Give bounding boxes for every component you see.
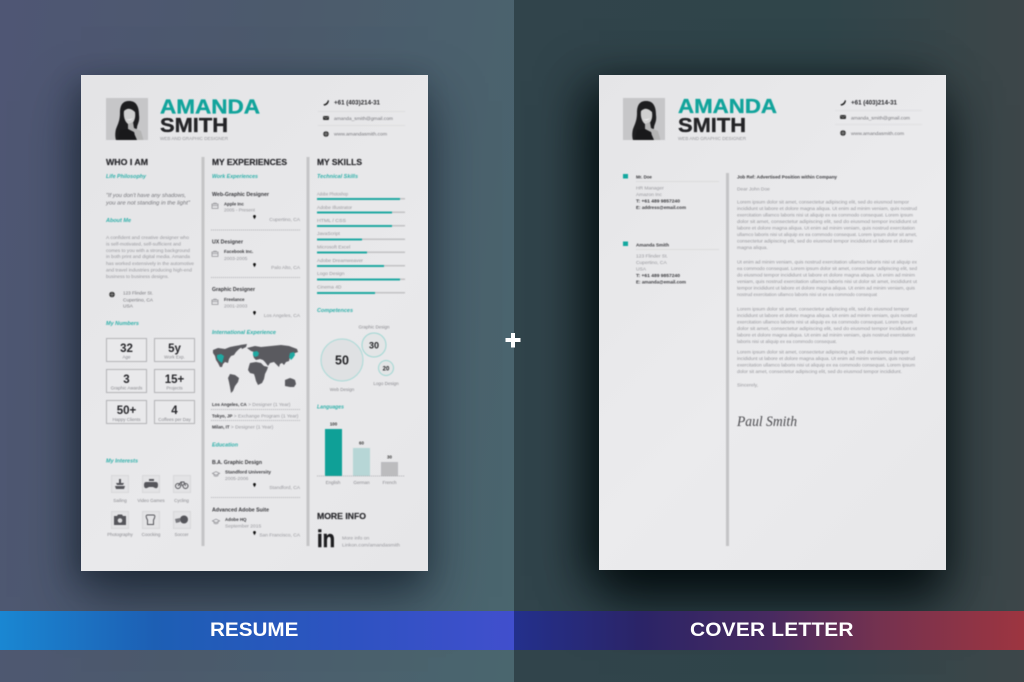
name: WEB AND GRAPHIC DESIGNER (678, 136, 747, 141)
my numbers: Happy Clients (112, 417, 141, 422)
recipient block: HR Manager (636, 186, 664, 192)
my numbers: 5y (168, 343, 181, 355)
skill bars: JavaScript (317, 231, 340, 237)
paragraph 1: magna aliqua. (737, 245, 768, 251)
paragraph 2: veniam, quis nostrud exercitation ullamco laboris nisi ut dolor sit amet, incididunt ut (737, 279, 918, 285)
my numbers: Coffees per Day (158, 417, 191, 422)
locations list: Milan, IT > Designer (1 Year) (212, 424, 274, 430)
my numbers: Graphic Awards (111, 386, 143, 390)
paragraph 3: labore et dolore magna aliqua. Ut enim ad minim veniam, quis nostrud exercitation (737, 332, 915, 338)
bubble chart: 30 (369, 340, 379, 350)
paragraph 2: nostrud exercitation ullamco laboris nisi ut ex ea commodo consequat (737, 292, 878, 298)
paragraph 2: do eiusmod tempor incididunt ut labore et dolore magna aliqua. Ut enim ad minim (737, 272, 915, 278)
column: who i am: business to business designs. (106, 274, 169, 280)
column: who i am: has worked extensively in the automotive (106, 261, 194, 267)
panel: resume page (81, 75, 428, 571)
letter body (737, 174, 918, 388)
paragraph 3 (737, 306, 918, 345)
contact details (835, 100, 922, 137)
paragraph 1 (737, 200, 918, 251)
panel: cover letter page (599, 75, 946, 570)
column: who i am: comes to you with a strong background (106, 248, 190, 254)
my numbers: 3 (123, 374, 130, 386)
sender block: E: amanda@email.com (636, 280, 686, 284)
skill bars: HTML / CSS (317, 218, 347, 224)
language bar chart: French (382, 480, 397, 485)
job: graphic designer: Graphic Designer (212, 287, 255, 293)
bubble chart: 20 (383, 366, 390, 372)
name: SMITH (678, 114, 746, 137)
column divider (726, 173, 729, 546)
sender block: T: +61 489 9857240 (636, 273, 681, 278)
my interests: Soccer (174, 532, 189, 537)
contact details: amanda_smith@gmail.com (851, 116, 910, 122)
job: web-graphic designer: 2005 - Present (224, 208, 256, 214)
sender block: Amanda Smith (636, 242, 669, 248)
skill bars: Cinema 4D (317, 284, 342, 290)
name: WEB AND GRAPHIC DESIGNER (160, 136, 229, 141)
job: graphic designer (212, 287, 301, 319)
job: web-graphic designer: Apple Inc (224, 202, 244, 206)
education: graphic design: 2005-2006 (225, 476, 249, 482)
linkedin: More info on (342, 536, 369, 542)
background: left half (0, 0, 514, 682)
column: who i am: A confident and creative designer who (106, 235, 189, 241)
my interests: My Interests (106, 458, 138, 464)
column: who i am: WHO I AM (106, 157, 148, 167)
my interests: Video Games (137, 498, 165, 503)
paragraph 3: laboris nisi ut aliquip ex ea commodo consequat. (737, 339, 837, 345)
job: graphic designer: Los Angeles, CA (264, 313, 301, 319)
paragraph 1: ullamco laboris nisi ut aliquip ex ea commodo consequat. Lorem ipsum dolor sit amet, (737, 232, 917, 238)
name: AMANDA (678, 95, 777, 118)
job: ux designer (212, 240, 301, 271)
education: graphic design: Standford University (225, 470, 272, 474)
photo (623, 98, 665, 140)
language bar chart: 30 (387, 454, 392, 460)
contact details: +61 (403)214-31 (334, 100, 381, 106)
paragraph 4: Lorem ipsum dolor sit amet, consectetur adipiscing elit, sed do eiusmod tempor (737, 350, 909, 356)
my interests: Sailing (113, 498, 127, 503)
column dividers (203, 157, 308, 546)
letter body: Sincerely, (737, 382, 758, 388)
paragraph 3: incididunt ut labore et dolore magna aliqua. Ut enim ad minim veniam, quis nostrud (737, 313, 917, 319)
column: my skills (317, 157, 405, 553)
language bar chart: German (353, 480, 370, 485)
skill bars: Adobe Dreamweaver (317, 258, 363, 264)
sender block: 123 Flinder St. (636, 254, 668, 260)
paragraph 1: exercitation ullamco laboris nisi ut aliquip ex ea commodo consequat. Lorem ipsum (737, 212, 913, 218)
my interests: Cycling (174, 498, 189, 503)
contact details (318, 100, 405, 138)
world map (213, 344, 298, 393)
paragraph 1: Lorem ipsum dolor sit amet, consectetur adipiscing elit, sed do eiusmod tempor (737, 200, 909, 206)
job: ux designer: Palo Alto, CA (271, 265, 301, 271)
column: my experiences: International Experience (212, 330, 276, 336)
column: my skills: Languages (317, 404, 344, 410)
background: right half (514, 0, 1024, 682)
my numbers (106, 321, 194, 424)
my numbers: Projects (166, 386, 183, 390)
education: adobe suite (212, 508, 301, 538)
contact details: www.amandasmith.com (851, 131, 904, 137)
language bar chart: 60 (359, 440, 364, 446)
my numbers: 50+ (117, 405, 137, 417)
language bar chart: 100 (330, 422, 338, 426)
job: ux designer: Facebook Inc. (224, 249, 253, 254)
linkedin (317, 526, 400, 553)
plus sign (506, 333, 520, 348)
education: adobe suite: Advanced Adobe Suite (212, 508, 269, 514)
column: my experiences (211, 157, 301, 538)
column: who i am: "If you don't have any shadows, (106, 193, 186, 199)
column: who i am: Life Philosophy (106, 174, 147, 180)
paragraph 2: ea commodo consequat. Lorem ipsum dolor sit amet, consectetur adipiscing elit, sed (737, 266, 917, 272)
paragraph 1: labore et dolore magna aliqua. Ut enim ad minim veniam, quis nostrud exercitation (737, 226, 915, 232)
name: AMANDA (160, 96, 260, 118)
education: graphic design: Standford, CA (269, 485, 301, 491)
column: who i am: in both print and digital media. Amanda (106, 254, 190, 260)
contact details: +61 (403)214-31 (851, 100, 898, 106)
bubble chart: Web Design (330, 387, 355, 392)
language bar chart: English (326, 480, 341, 485)
job: web-graphic designer: Web-Graphic Designer (212, 192, 269, 198)
job: ux designer: UX Designer (212, 240, 243, 246)
column: my experiences: Education (212, 442, 239, 448)
paragraph 2: tempor incididunt ut labore et dolore magna aliqua. Ut enim ad minim veniam, quis (737, 286, 916, 292)
my interests: Coocking (142, 532, 161, 537)
paragraph 1: incididunt ut labore et dolore magna aliqua. Ut enim ad minim veniam, quis nostrud (737, 206, 917, 212)
education: adobe suite: San Francisco, CA (259, 532, 301, 538)
column: my skills: MORE INFO (317, 511, 366, 521)
sender block (623, 242, 719, 284)
paragraph 1: dolor sit amet, consectetur adipiscing elit, sed do eiusmod tempor incididunt ut (737, 219, 918, 225)
locations list: Los Angeles, CA > Designer (1 Year) (212, 402, 291, 408)
banner: resume (0, 611, 514, 650)
banner: cover letter (514, 611, 1024, 650)
column: who i am: About Me (105, 218, 131, 224)
recipient block: Mr. Doe (636, 174, 652, 180)
paragraph 3: exercitation ullamco laboris nisi ut aliquip ex ea commodo consequat. Lorem ipsum (737, 320, 913, 326)
recipient block (623, 174, 719, 210)
recipient block: E: address@email.com (636, 205, 686, 210)
sender block: USA (636, 266, 647, 272)
name (160, 96, 260, 141)
bubble chart: Graphic Design (358, 324, 390, 330)
bubble chart: Logo Design (373, 381, 399, 386)
letter body: Job Ref: Advertised Position within Company (737, 174, 838, 180)
skill bars: Adobe Photoshop (317, 192, 348, 198)
bubble chart (321, 324, 399, 392)
column: my experiences: Work Experiences (212, 174, 258, 180)
column: my skills: Competences (317, 308, 353, 314)
letter body: Dear John Doe (737, 186, 770, 192)
my numbers: Age (122, 354, 131, 360)
job: ux designer: 2003-2005 (224, 256, 248, 262)
paragraph 4: exercitation ullamco laboris nisi ut aliquip ex ea commodo consequat. Lorem ipsum (737, 362, 915, 368)
name (678, 95, 777, 141)
education: adobe suite: September 2015 (225, 524, 261, 530)
photo (106, 98, 148, 140)
job: graphic designer: 2001-2003 (224, 304, 248, 310)
column: who i am: you are not standing in the light" (105, 200, 191, 206)
language bar chart (317, 422, 405, 485)
paragraph 3: dolor sit amet, consectetur adipiscing elit, sed do eiusmod tempor incididunt ut (737, 326, 918, 332)
recipient block: Amazon Inc (636, 192, 662, 198)
column: who i am: Cupertino, CA (123, 298, 154, 304)
job: graphic designer: Freelance (224, 297, 245, 302)
sender block: Cupertino, CA (636, 260, 667, 266)
skill bars: Microsoft Excel (317, 244, 350, 250)
my interests (106, 458, 190, 537)
my numbers: My Numbers (106, 321, 139, 327)
contact details: www.amandasmith.com (334, 132, 387, 138)
education: graphic design: B.A. Graphic Design (212, 460, 262, 466)
column: who i am: 123 Flinder St. (123, 290, 153, 296)
my interests: Photography (107, 532, 134, 537)
paragraph 3: Lorem ipsum dolor sit amet, consectetur adipiscing elit, sed do eiusmod tempor (737, 306, 909, 312)
skill bars: Adobe Illustrator (317, 205, 352, 211)
column: who i am: and travel industries producing high-end (106, 268, 192, 274)
education: graphic design (212, 460, 301, 491)
column: my experiences: MY EXPERIENCES (212, 157, 287, 167)
bubble chart: 50 (335, 354, 349, 368)
paragraph 2 (737, 260, 918, 298)
recipient block: T: +61 489 9857240 (636, 198, 681, 204)
job: web-graphic designer: Cupertino, CA (269, 217, 301, 223)
my numbers: 15+ (165, 374, 185, 386)
my numbers: Work Exp. (164, 354, 185, 360)
column: who i am: USA (123, 304, 134, 310)
job: web-graphic designer (212, 192, 301, 223)
my numbers: 32 (120, 343, 133, 355)
paragraph 4: incididunt ut labore et dolore magna aliqua. Ut enim ad minim veniam, quis nostrud (737, 356, 915, 362)
linkedin: Linkon.com/amandasmith (342, 542, 400, 548)
banner: resume: RESUME (210, 619, 298, 641)
column: my skills: MY SKILLS (317, 157, 362, 167)
paragraph 4 (737, 350, 915, 375)
column: my skills: Technical Skills (317, 174, 358, 180)
skill bars (317, 192, 405, 294)
my numbers: 4 (171, 405, 178, 417)
banner: cover letter: COVER LETTER (690, 619, 854, 641)
contact details: amanda_smith@gmail.com (334, 116, 393, 122)
locations list (211, 402, 300, 430)
education: adobe suite: Adobe HQ (225, 517, 247, 522)
column: who i am: is self-motivated, self-sufficient and (106, 242, 181, 248)
paragraph 4: dolor sit amet, consectetur adipiscing elit, sed do eiusmod tempor incididunt. (737, 369, 902, 375)
name: SMITH (160, 114, 228, 137)
locations list: Tokyo, JP > Exchange Program (1 Year) (212, 414, 299, 420)
skill bars: Logo Design (317, 271, 345, 277)
paragraph 1: consectetur adipiscing elit, sed do eiusmod tempor incididunt ut labore et dolore (737, 238, 913, 244)
column: who i am (105, 157, 194, 310)
paragraph 2: Ut enim ad minim veniam, quis nostrud exercitation ullamco laboris nisi ut aliquip ex (737, 260, 918, 266)
linkedin: in (317, 526, 335, 553)
signature: Paul Smith (736, 414, 797, 430)
